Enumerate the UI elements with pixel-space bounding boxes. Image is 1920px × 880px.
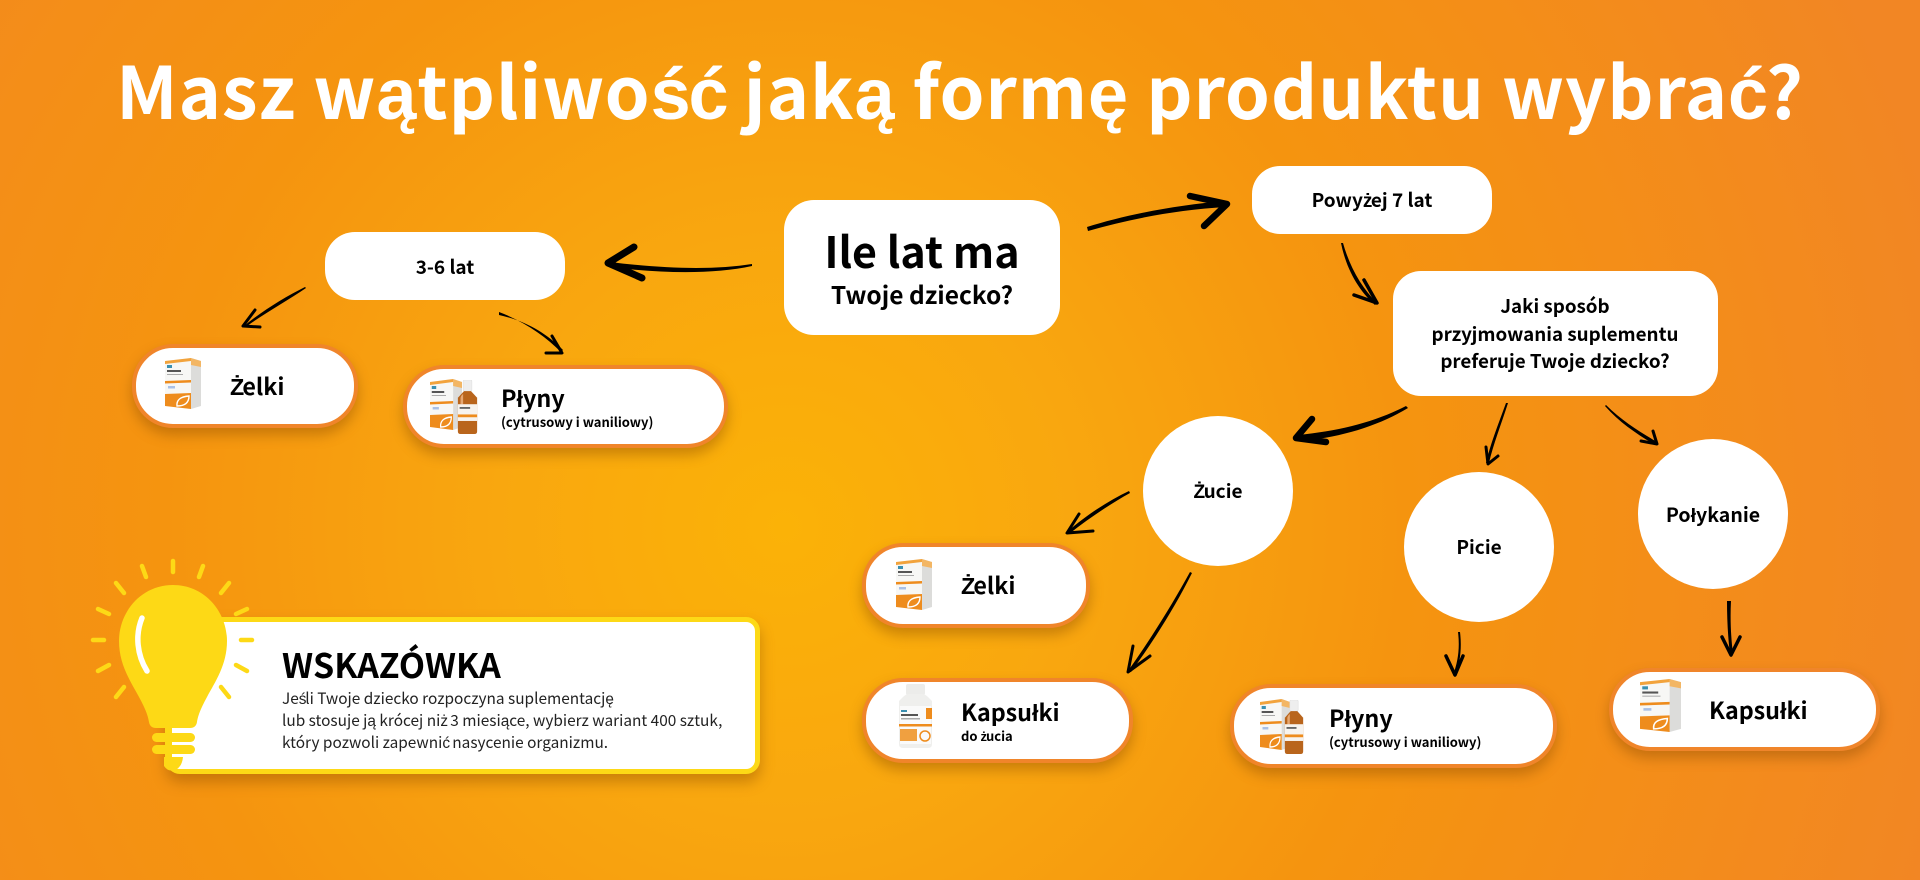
icon: syrup box and bottle [1260, 699, 1304, 754]
label: Powyżej 7 lat: Powyżej 7 lat [1312, 186, 1432, 213]
arrow: age question to Powyżej 7 lat [1087, 196, 1227, 231]
label: Płyny: Płyny [501, 380, 565, 414]
icon: gummies box [896, 559, 932, 610]
panel: tip [166, 617, 760, 774]
arrow: 3-6 lat to Płyny [499, 312, 563, 353]
arrow: age question to 3-6 lat [608, 247, 752, 278]
question text: Jaki sposób przyjmowania suplementu preferuje Twoje dziecko? [1432, 292, 1678, 374]
label: Picie: Picie [1456, 533, 1502, 560]
arrow: Powyżej 7 lat to intake question [1341, 243, 1377, 305]
sublabel: do żucia: do żucia [961, 726, 1013, 745]
product pill: Kapsułki do żucia [862, 678, 1133, 763]
label: Żelki: Żelki [961, 567, 1015, 601]
heading: Ile lat ma: Ile lat ma [824, 219, 1020, 281]
product pill: Żelki (żucie) [862, 543, 1090, 628]
circle: Połykanie [1638, 439, 1788, 589]
tip body text: Jeśli Twoje dziecko rozpoczyna suplementację lub stosuje ją krócej niż 3 miesiące, wybierz wariant 400 sztuk, który pozwoli zapewnić nasycenie organizmu. [282, 687, 722, 753]
title: Masz wątpliwość jaką formę produktu wybrać? [116, 35, 1804, 140]
sublabel: flavours: (cytrusowy i waniliowy) [1329, 732, 1481, 751]
arrow: Żucie to Kapsułki do żucia [1128, 572, 1192, 672]
age box: Powyżej 7 lat [1252, 166, 1492, 234]
arrow: intake question to Połykanie [1605, 405, 1657, 445]
subheading: Twoje dziecko: Twoje dziecko? [831, 277, 1013, 312]
product pill: Żelki (3-6 lat) [132, 344, 358, 428]
circle: Picie [1404, 472, 1554, 622]
label: Kapsułki: Kapsułki [1709, 692, 1808, 726]
icon: capsules box [1640, 679, 1681, 732]
label: Płyny: Płyny [1329, 700, 1393, 734]
tip heading: WSKAZÓWKA [282, 639, 501, 688]
product pill: Kapsułki (połykanie) [1609, 668, 1880, 751]
label: Żucie: Żucie [1193, 477, 1243, 504]
arrow: 3-6 lat to Żelki [243, 287, 306, 327]
circle: Żucie [1143, 416, 1293, 566]
arrow: intake question to Picie [1486, 403, 1508, 464]
icon: capsule jar [899, 684, 932, 748]
label: 3-6 lat: 3-6 lat [416, 253, 474, 280]
arrow: intake question to Żucie [1296, 406, 1408, 442]
label: Połykanie: Połykanie [1666, 499, 1760, 528]
label: Żelki: Żelki [230, 368, 284, 402]
arrow: Picie to Płyny [1446, 632, 1463, 676]
sublabel: flavours: (cytrusowy i waniliowy) [501, 412, 653, 431]
age box: 3-6 lat [325, 232, 565, 300]
icon: syrup box and bottle [430, 379, 478, 434]
question box: child's age [784, 200, 1060, 335]
question box: preferred intake method [1393, 271, 1718, 396]
arrow: Połykanie to Kapsułki [1722, 601, 1740, 655]
label: Kapsułki: Kapsułki [961, 694, 1060, 728]
arrow: Żucie to Żelki [1067, 491, 1130, 534]
product pill: Płyny (picie) [1230, 684, 1557, 768]
product pill: Płyny (3-6 lat) [403, 365, 728, 448]
icon: gummies box [165, 358, 201, 409]
